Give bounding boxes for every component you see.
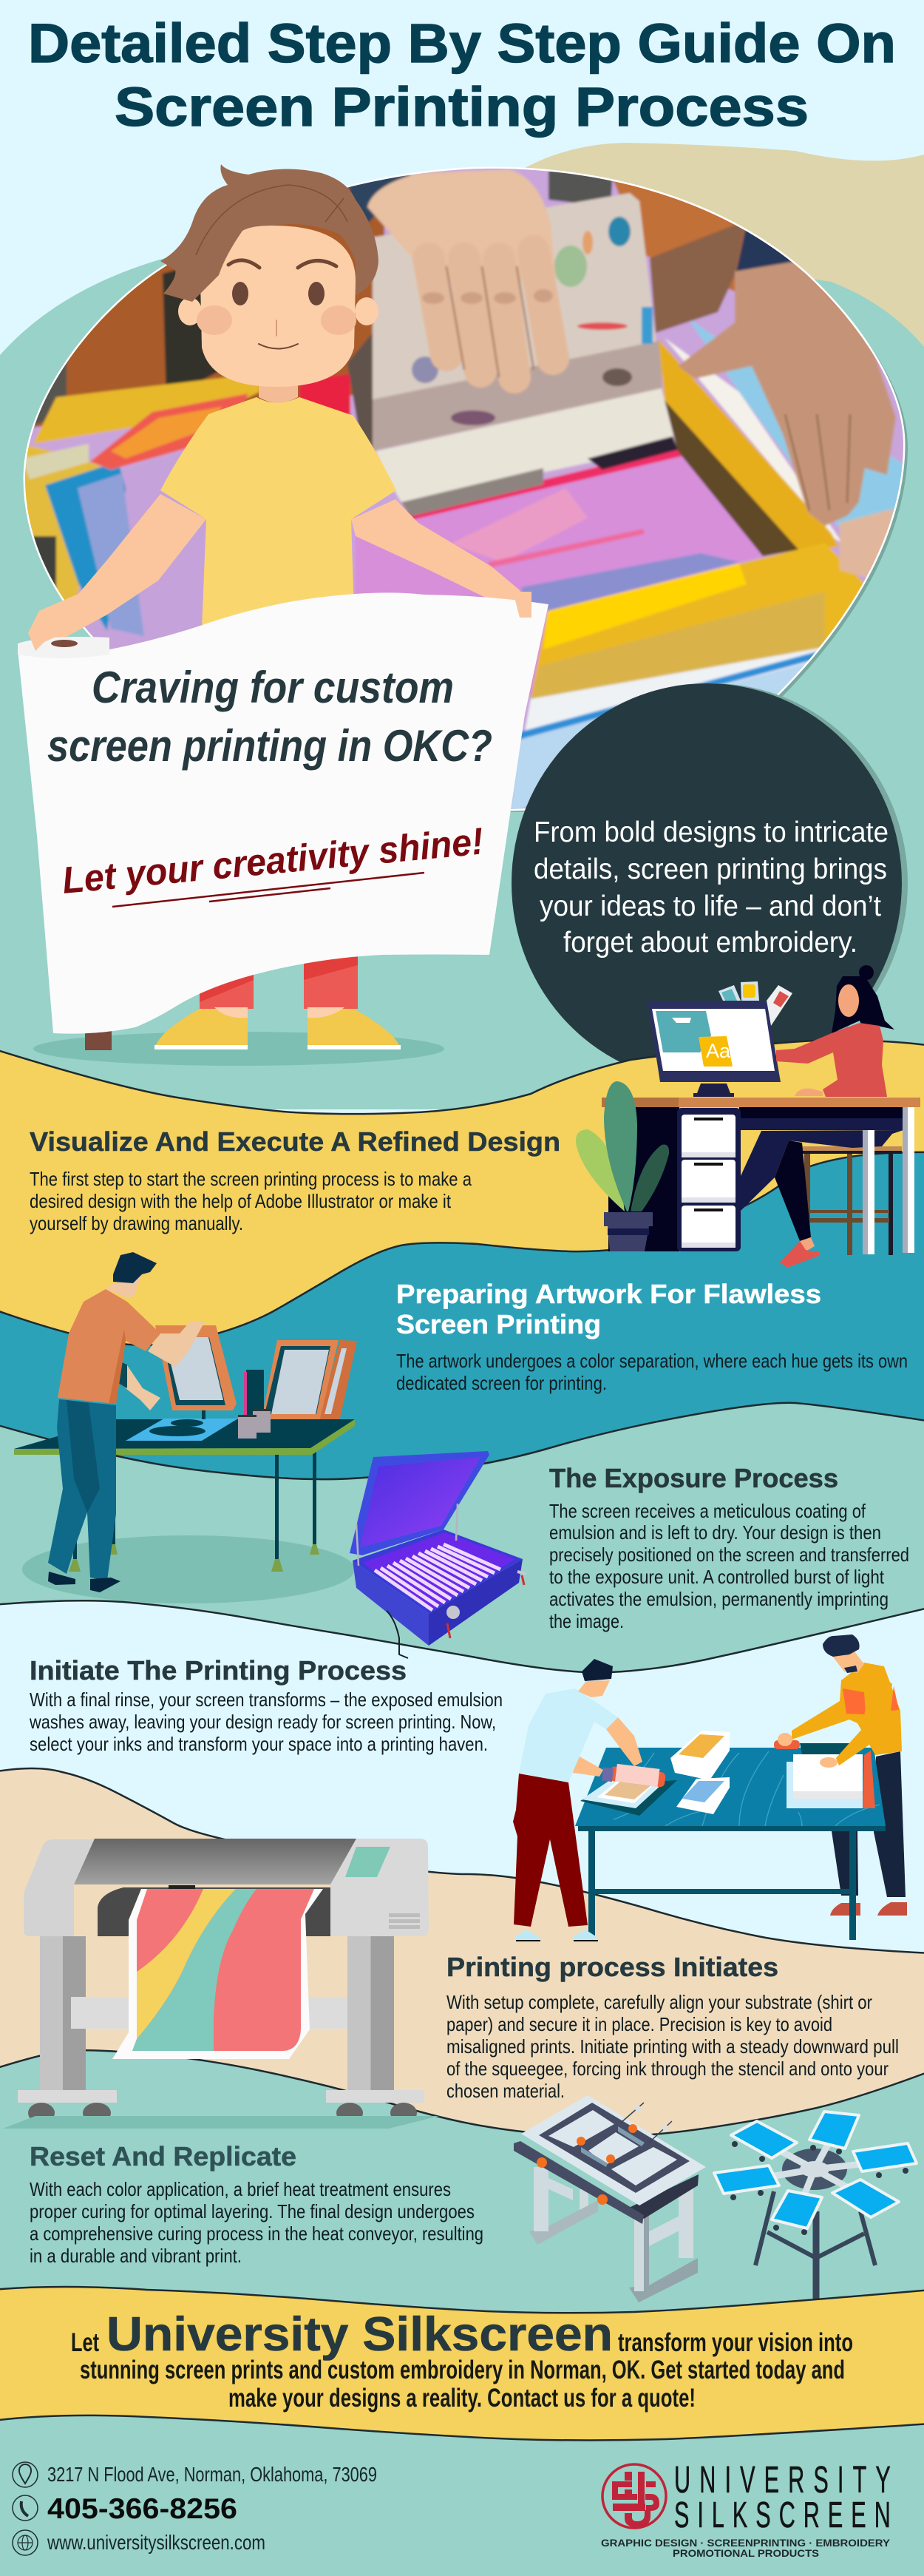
step 6 text: With each color application, a brief heat treatment ensures <box>30 2178 451 2200</box>
banner text: Craving for custom <box>92 663 454 712</box>
left man arms <box>542 1717 642 1777</box>
step 4 text <box>29 1688 503 1755</box>
step 4 text: With a final rinse, your screen transforms – the exposed emulsion <box>30 1688 503 1711</box>
hair <box>113 1252 157 1283</box>
hands on banner <box>28 592 531 651</box>
tan wave top right <box>517 143 924 385</box>
title: Detailed Step By Step Guide On <box>28 13 896 74</box>
teal hero background <box>0 222 924 1109</box>
floor shadow <box>22 1535 355 1603</box>
leg front right <box>634 2214 649 2291</box>
logo wordmark: SILKSCREEN <box>674 2495 891 2535</box>
right housing <box>330 1839 429 1936</box>
step 3 text: The screen receives a meticulous coating of <box>549 1500 866 1522</box>
dark circle callout <box>512 683 908 1083</box>
left frame and screen <box>22 444 222 814</box>
logo <box>601 2458 891 2559</box>
base interior <box>362 1532 515 1611</box>
shirt side panel <box>109 1329 126 1404</box>
lower arm <box>126 1363 160 1410</box>
step 2 heading <box>396 1279 821 1339</box>
right frame side <box>659 339 839 551</box>
leg right rear <box>679 2184 693 2258</box>
step 2 text: dedicated screen for printing. <box>396 1372 607 1394</box>
right side backdrop <box>689 320 903 528</box>
tagline underline <box>112 873 424 907</box>
table edge <box>578 1826 886 1831</box>
dark circle callout: details, screen printing brings <box>534 853 887 885</box>
paper <box>112 1889 323 2059</box>
call to action band <box>0 2287 924 2441</box>
step 3 heading: The Exposure Process <box>549 1463 838 1493</box>
face <box>200 226 356 387</box>
top cover <box>74 1839 356 1884</box>
table top <box>521 2095 706 2205</box>
underside <box>629 2174 699 2219</box>
clamp bars <box>581 2126 645 2167</box>
leg front left <box>534 2167 548 2231</box>
printhead clip <box>169 1885 195 1893</box>
right man hair <box>823 1634 860 1657</box>
chair <box>802 1146 902 1255</box>
banner text <box>47 663 492 771</box>
centre hand <box>367 169 556 377</box>
step 4 text: select your inks and transform your space into a printing haven. <box>30 1733 488 1755</box>
logo emblem <box>602 2464 666 2528</box>
drawers <box>677 1108 741 1251</box>
logo tagline: GRAPHIC DESIGN · SCREENPRINTING · EMBROIDERY <box>601 2537 891 2549</box>
desk under panel <box>608 1107 679 1251</box>
vent <box>389 1913 420 1929</box>
stand <box>755 2191 875 2299</box>
right man sweater <box>792 1663 902 1755</box>
lid <box>350 1451 489 1555</box>
step 4 heading: Initiate The Printing Process <box>30 1655 407 1686</box>
open press <box>580 1780 677 1816</box>
redraw front arm <box>836 1666 892 1765</box>
left man hair <box>582 1659 613 1681</box>
step 3 text <box>549 1500 909 1632</box>
teal section <box>0 1403 924 2576</box>
banner post <box>85 1028 112 1050</box>
neck <box>259 381 298 402</box>
roller <box>98 1887 330 1936</box>
table top <box>14 1419 355 1449</box>
mid right rail <box>649 2211 688 2246</box>
cheeks <box>197 305 356 335</box>
roll core <box>51 640 78 647</box>
title <box>28 13 896 138</box>
illustration: man preparing screens <box>14 1252 357 1603</box>
contact: website <box>13 2530 265 2555</box>
pallets <box>714 2112 917 2228</box>
plant <box>576 1081 669 1251</box>
desk top <box>602 1098 920 1107</box>
pink mesh <box>355 451 763 695</box>
call to action text: Let <box>71 2328 99 2357</box>
inner frame lip <box>665 400 800 556</box>
left housing <box>24 1839 95 1936</box>
lower left rail <box>529 2200 598 2245</box>
left man face <box>578 1680 610 1697</box>
right man front arm <box>836 1666 892 1765</box>
stacked prints one <box>670 1731 730 1780</box>
woman <box>741 965 903 1268</box>
table legs and bar <box>588 1831 856 1940</box>
step 5 heading: Printing process Initiates <box>446 1952 778 1982</box>
table grain <box>614 1751 880 1826</box>
illustration: large format printer <box>3 1839 439 2129</box>
bottom right fingers <box>840 509 893 584</box>
squeegee wood <box>370 191 656 400</box>
base side right <box>429 1559 523 1646</box>
logo tagline: PROMOTIONAL PRODUCTS <box>673 2547 819 2559</box>
step 3 text: the image. <box>549 1610 624 1632</box>
paint cans <box>238 1409 271 1439</box>
contact: phone: 405-366-8256 <box>47 2493 237 2525</box>
shirt <box>58 1289 160 1404</box>
illustration: screen frame table <box>514 2095 706 2302</box>
hub <box>782 2149 847 2190</box>
feet <box>18 2090 424 2103</box>
step 2 text <box>396 1350 908 1394</box>
step 1 text: The first step to start the screen printing process is to make a <box>30 1168 472 1190</box>
lid stays <box>356 1504 458 1566</box>
hair lines <box>196 185 347 255</box>
left man shoes <box>516 1930 598 1941</box>
shoes <box>154 1007 401 1049</box>
floor shadow <box>3 2116 439 2129</box>
colour swatches <box>719 981 792 1026</box>
dark circle callout: forget about embroidery. <box>563 927 857 959</box>
dark circle callout: From bold designs to intricate <box>534 817 889 848</box>
ground shadow <box>33 1032 444 1066</box>
contact: address: 3217 N Flood Ave, Norman, Oklahoma, 73069 <box>47 2463 377 2486</box>
windows <box>548 2110 677 2185</box>
left man shirt <box>519 1688 618 1782</box>
illustration: two people printing at table <box>513 1634 907 1941</box>
right man stripe <box>843 1686 899 1714</box>
photo border <box>25 169 903 809</box>
white sheet below frame <box>523 646 820 732</box>
light blue section <box>0 1600 924 2576</box>
lid glow <box>360 1457 480 1547</box>
yellow section <box>0 1041 924 2576</box>
dark circle callout: your ideas to life – and don’t <box>540 890 881 922</box>
logo tagline <box>601 2537 891 2559</box>
back hand <box>650 220 746 333</box>
base side left <box>353 1561 429 1646</box>
shoes <box>48 1572 120 1592</box>
paper roll end <box>18 637 109 658</box>
monitor <box>648 1001 781 1097</box>
step 2 heading: Preparing Artwork For Flawless <box>396 1279 821 1309</box>
light tubes <box>375 1544 500 1610</box>
dark inner shirt <box>118 1361 127 1388</box>
trousers <box>200 947 358 1009</box>
step 2 heading: Screen Printing <box>396 1309 601 1339</box>
lower frame <box>531 543 871 699</box>
print teal band <box>132 1889 257 2051</box>
table legs <box>73 1450 316 1559</box>
table edge <box>14 1419 355 1455</box>
step 4 text: washes away, leaving your design ready for screen printing. Now, <box>29 1711 496 1733</box>
step 1 heading: Visualize And Execute A Refined Design <box>30 1126 560 1157</box>
illustration: exposure unit <box>350 1451 526 1658</box>
step 6 text: in a durable and vibrant print. <box>30 2245 242 2267</box>
base rim <box>353 1529 523 1614</box>
illustration: designer at desk <box>576 965 920 1268</box>
hub cap <box>800 2161 829 2177</box>
trousers <box>48 1399 116 1581</box>
contact: address <box>13 2462 377 2487</box>
call to action text <box>71 2307 853 2413</box>
photo: hands using squeegee on yellow screen frame <box>15 163 917 821</box>
tagline: Let your creativity shine! <box>61 819 486 902</box>
right man shoes <box>830 1902 907 1916</box>
step 1 text: yourself by drawing manually. <box>30 1212 243 1234</box>
photo shadow <box>30 172 908 812</box>
monitor: Aa <box>706 1040 731 1062</box>
wheels <box>28 2103 417 2123</box>
control panel <box>345 1847 390 1877</box>
rod tips <box>635 2106 668 2131</box>
lower right rail <box>629 2258 698 2302</box>
table top <box>575 1748 886 1826</box>
gauge and clamps <box>446 1572 526 1638</box>
bottom teal section <box>0 2050 924 2576</box>
neck <box>106 1274 142 1298</box>
crossbar <box>71 1997 347 2029</box>
front hand <box>678 261 896 526</box>
rods <box>621 2103 672 2143</box>
step 1 text <box>30 1168 472 1234</box>
step 6 text: proper curing for optimal layering. The final design undergoes <box>30 2200 475 2222</box>
brows, nose and smile <box>228 260 336 349</box>
tan section <box>0 1768 924 2576</box>
step 5 text <box>446 1991 899 2102</box>
desk legs <box>863 1107 914 1254</box>
squeegee blade band <box>376 388 676 502</box>
sleeve <box>735 226 797 278</box>
step 6 text: a comprehensive curing process in the heat conveyor, resulting <box>30 2222 483 2245</box>
frame front <box>264 1340 339 1425</box>
right man beard <box>844 1666 857 1673</box>
step 1 text: desired design with the help of Adobe Illustrator or make it <box>30 1190 452 1212</box>
back leg and rails <box>548 2178 588 2211</box>
power cord <box>387 1611 408 1658</box>
step 5 text: paper) and secure it in place. Precision is key to avoid <box>446 2013 832 2035</box>
contact: website: www.universitysilkscreen.com <box>47 2531 265 2554</box>
frame one <box>155 1325 237 1419</box>
illustration: six-arm carousel press <box>714 2112 917 2299</box>
stacked prints two <box>676 1777 730 1814</box>
teal-blue section <box>0 1152 924 2576</box>
eyes <box>232 282 325 305</box>
orange knobs <box>537 2124 637 2205</box>
large paper <box>787 1743 875 1808</box>
banner text: screen printing in OKC? <box>47 721 492 771</box>
upper arm <box>148 1322 205 1367</box>
ears <box>178 297 378 325</box>
legs <box>40 1936 394 2092</box>
frame back <box>318 1340 357 1425</box>
step 5 text: chosen material. <box>446 2080 565 2102</box>
roller <box>602 1762 666 1788</box>
right man trousers <box>832 1751 906 1897</box>
right man face <box>832 1652 864 1673</box>
call to action text: University Silkscreen <box>106 2307 613 2361</box>
hair <box>160 164 378 302</box>
character: boy holding banner <box>28 164 531 1049</box>
print yellow band <box>137 1889 236 2039</box>
arms <box>28 494 531 652</box>
frame <box>539 2103 690 2193</box>
table feet <box>69 1544 319 1572</box>
title: Screen Printing Process <box>115 76 809 138</box>
logo wordmark: UNIVERSITY <box>674 2458 891 2501</box>
logo wordmark <box>674 2458 891 2535</box>
arms <box>761 2137 869 2200</box>
print red <box>132 1889 314 2051</box>
desk under bars <box>739 1107 903 1130</box>
left man trousers <box>513 1774 588 1927</box>
banner <box>18 592 548 1034</box>
right man hands and scraper <box>774 1733 838 1768</box>
shirt <box>160 397 396 666</box>
call to action text: make your designs a reality. Contact us for a quote! <box>228 2384 696 2413</box>
blue sheet <box>126 1419 238 1441</box>
step 6 text <box>30 2178 483 2267</box>
rail and ink line <box>244 1370 264 1415</box>
side bar <box>514 2141 644 2224</box>
step 6 heading: Reset And Replicate <box>30 2141 296 2171</box>
pallet knobs <box>730 2141 908 2235</box>
